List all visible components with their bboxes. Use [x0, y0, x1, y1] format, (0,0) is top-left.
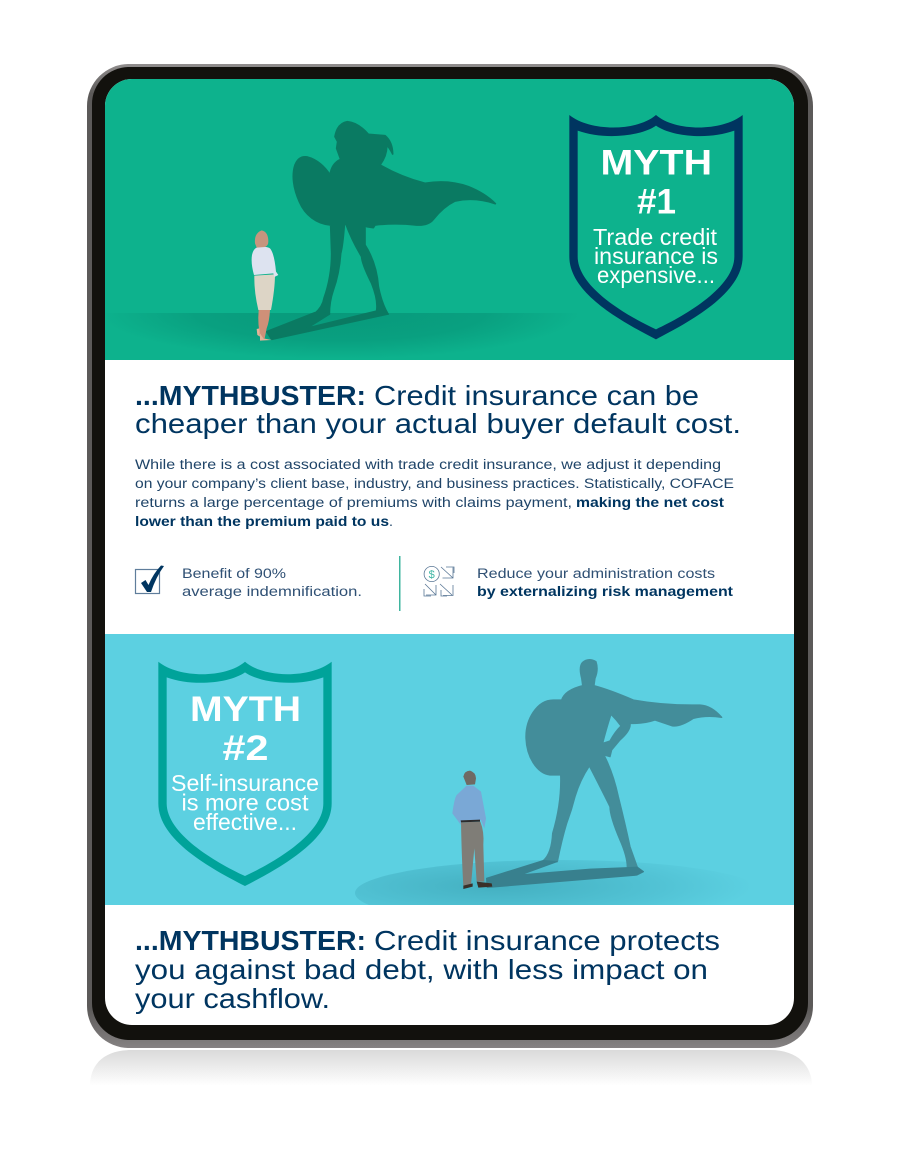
- icon: dollar and arrows: $: [429, 569, 435, 581]
- shield text: [593, 224, 718, 288]
- benefit text: [182, 566, 362, 600]
- shield title: MYTH: [190, 690, 301, 729]
- heading: mythbuster 2: [135, 925, 720, 1014]
- heading: mythbuster 1: [135, 380, 741, 439]
- tablet screen: [100, 79, 794, 1025]
- shield title: [603, 150, 710, 214]
- benefit: indemnification: [136, 566, 362, 600]
- heading: mythbuster 2: you against bad debt, with less impact on: [135, 954, 708, 985]
- floor glow: [355, 860, 698, 905]
- benefit text: Reduce your administration costs: [477, 566, 715, 582]
- heading: mythbuster 2: Credit insurance protects: [374, 925, 720, 956]
- shield title: #1: [637, 182, 676, 222]
- badge: myth 2 shield: [158, 662, 332, 886]
- benefit text: average indemnification.: [182, 584, 362, 600]
- heading: mythbuster 2: your cashflow.: [135, 983, 330, 1014]
- body text: making the net cost: [576, 495, 724, 511]
- illustration: woman seen from behind: [252, 230, 278, 341]
- shield text: Trade credit: [593, 224, 718, 250]
- benefit text: [477, 566, 733, 600]
- heading: mythbuster 1: cheaper than your actual buyer default cost.: [135, 408, 741, 439]
- panel: myth 2 banner: [105, 634, 794, 926]
- icon: dollar and arrows: [424, 566, 454, 596]
- shield text: insurance is: [594, 243, 718, 269]
- panel: myth 1 banner: [100, 79, 794, 360]
- shield outline: [569, 115, 743, 339]
- benefit text: Benefit of 90%: [182, 566, 286, 582]
- illustration: man seen from behind: [452, 771, 492, 889]
- floor glow: [143, 313, 536, 350]
- body text: lower than the premium paid to us: [135, 514, 389, 530]
- body text: .: [389, 514, 393, 530]
- tablet reflection: [90, 1050, 812, 1086]
- shield outline: [158, 662, 332, 886]
- heading: mythbuster 1: Credit insurance can be: [374, 380, 699, 411]
- benefit text: by externalizing risk management: [477, 584, 733, 600]
- benefit: administration costs: [424, 566, 733, 600]
- icon: check box: [136, 566, 164, 594]
- shield text: is more cost: [182, 790, 309, 816]
- shield title: [192, 696, 298, 760]
- shield text: Self-insurance: [171, 770, 319, 796]
- shield title: MYTH: [600, 144, 712, 182]
- shield text: effective...: [193, 809, 297, 835]
- illustration: superhero shadow: [487, 660, 722, 887]
- shield text: expensive...: [597, 262, 715, 288]
- illustration: superheroine shadow: [267, 122, 495, 339]
- heading: mythbuster 2: ...MYTHBUSTER:: [135, 925, 366, 956]
- body text: on your company’s client base, industry, and business practices. Statistically, COFACE: [135, 476, 734, 492]
- shield text: [172, 774, 318, 830]
- body text: [135, 457, 734, 530]
- shield title: #2: [222, 729, 268, 768]
- body text: returns a large percentage of premiums with claims payment,: [135, 495, 572, 511]
- heading: mythbuster 1: ...MYTHBUSTER:: [135, 380, 366, 411]
- tablet frame: [87, 64, 813, 1048]
- badge: myth 1 shield: [569, 115, 743, 339]
- body text: While there is a cost associated with trade credit insurance, we adjust it depending: [135, 457, 721, 473]
